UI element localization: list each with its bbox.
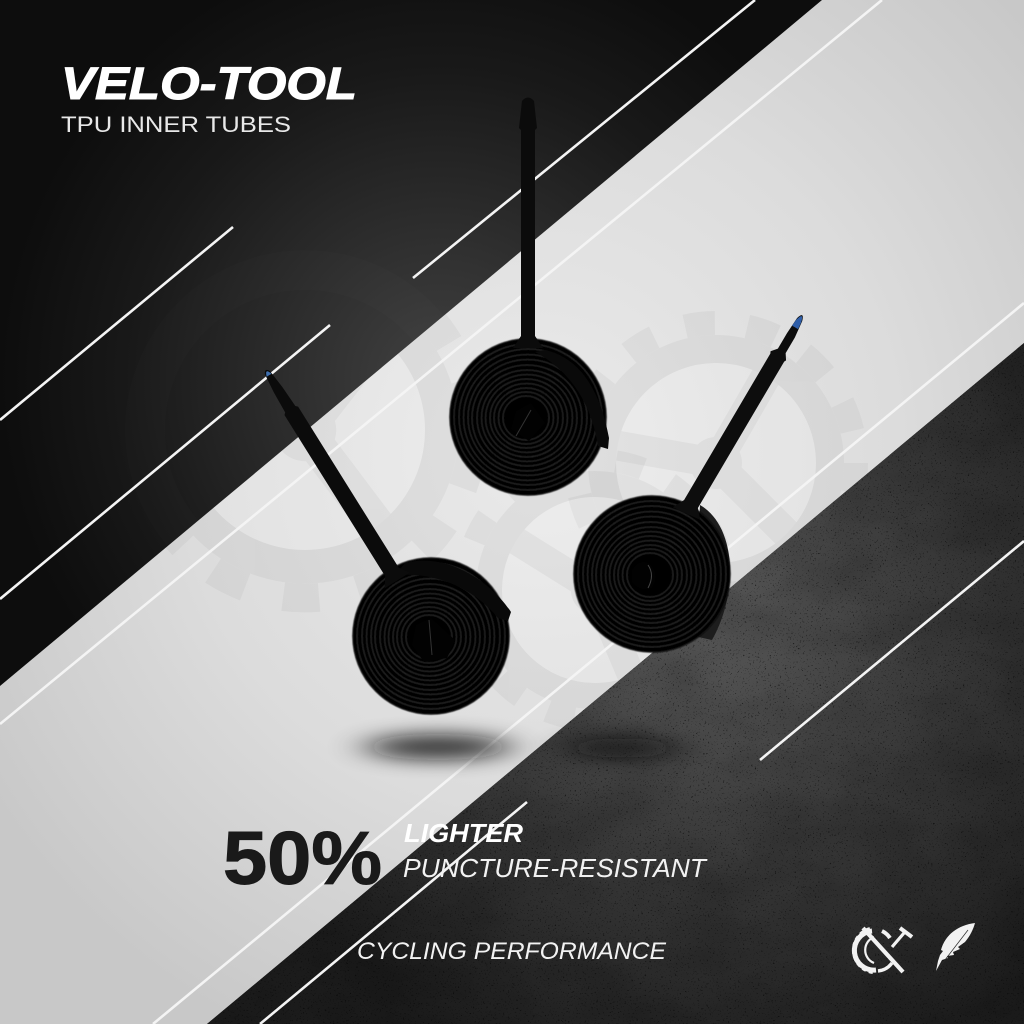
watermark gears xyxy=(214,311,1024,701)
inner tube: right xyxy=(574,308,816,652)
stat label: lighter: LIGHTER xyxy=(404,818,523,848)
stat: 50%: 50% xyxy=(223,816,382,900)
inner tube: top xyxy=(450,98,609,495)
panel: textured dark bottom-right area xyxy=(207,343,1024,1024)
faint gear on dark area xyxy=(145,270,465,590)
inner tube: left xyxy=(253,362,511,714)
icon: gear and hammer crossed out xyxy=(854,928,912,972)
tagline: CYCLING PERFORMANCE xyxy=(357,938,667,965)
subtitle: TPU INNER TUBES xyxy=(61,112,291,137)
floor shadows xyxy=(366,734,678,760)
title: VELO-TOOL xyxy=(61,58,357,109)
stat label: puncture-resistant: PUNCTURE-RESISTANT xyxy=(403,853,708,883)
icon: feather xyxy=(936,923,975,971)
